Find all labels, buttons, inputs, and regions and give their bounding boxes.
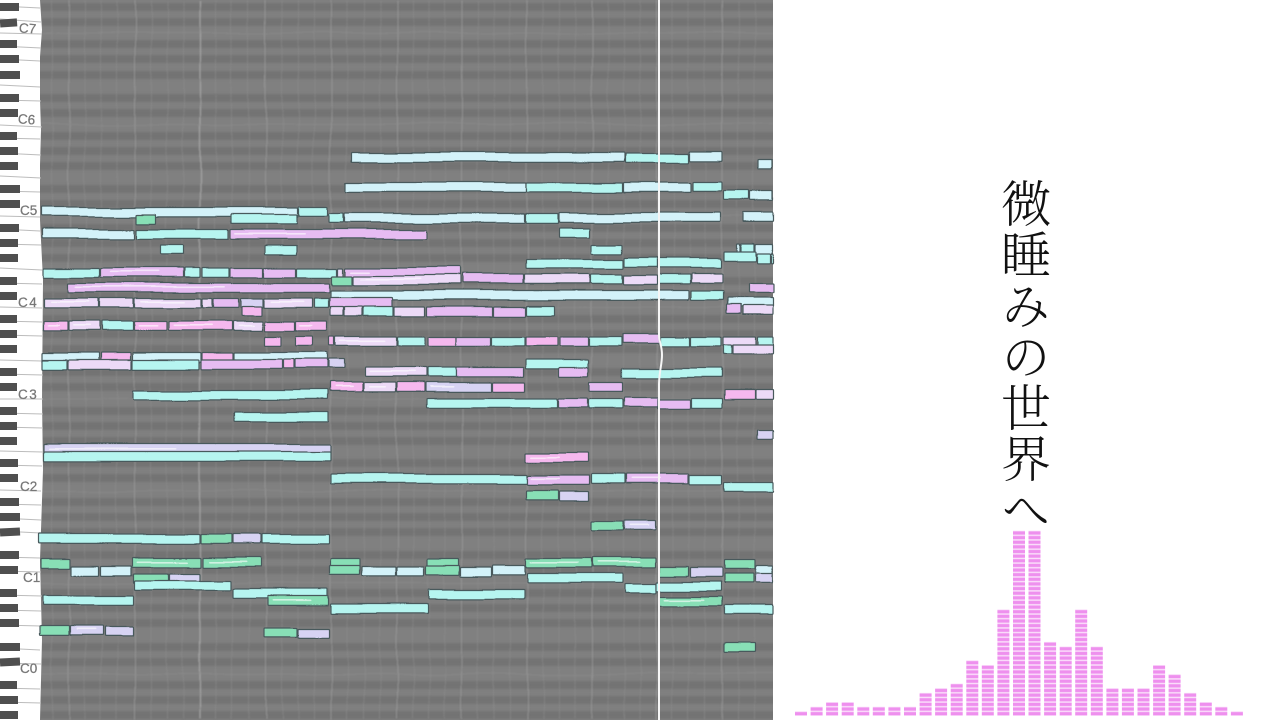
notes: low register <box>39 444 773 653</box>
octave labels: C0 <box>20 661 37 676</box>
level meter bar chart <box>795 531 1243 716</box>
piano keyboard <box>0 0 43 720</box>
octave labels: C6 <box>17 111 36 127</box>
notes: middle register <box>43 268 773 439</box>
notes: high register <box>40 152 773 269</box>
title: 微睡みの世界へ <box>994 178 1050 535</box>
octave labels: C7 <box>18 20 37 37</box>
octave labels: C1 <box>23 570 40 585</box>
octave labels: C5 <box>20 203 37 218</box>
note highlights <box>47 233 705 631</box>
black keys <box>0 3 20 719</box>
notes <box>39 152 773 653</box>
playhead <box>659 0 662 720</box>
octave labels <box>17 20 40 676</box>
octave labels: C3 <box>18 387 38 402</box>
octave labels: C2 <box>20 479 37 494</box>
octave labels: C4 <box>18 295 38 310</box>
